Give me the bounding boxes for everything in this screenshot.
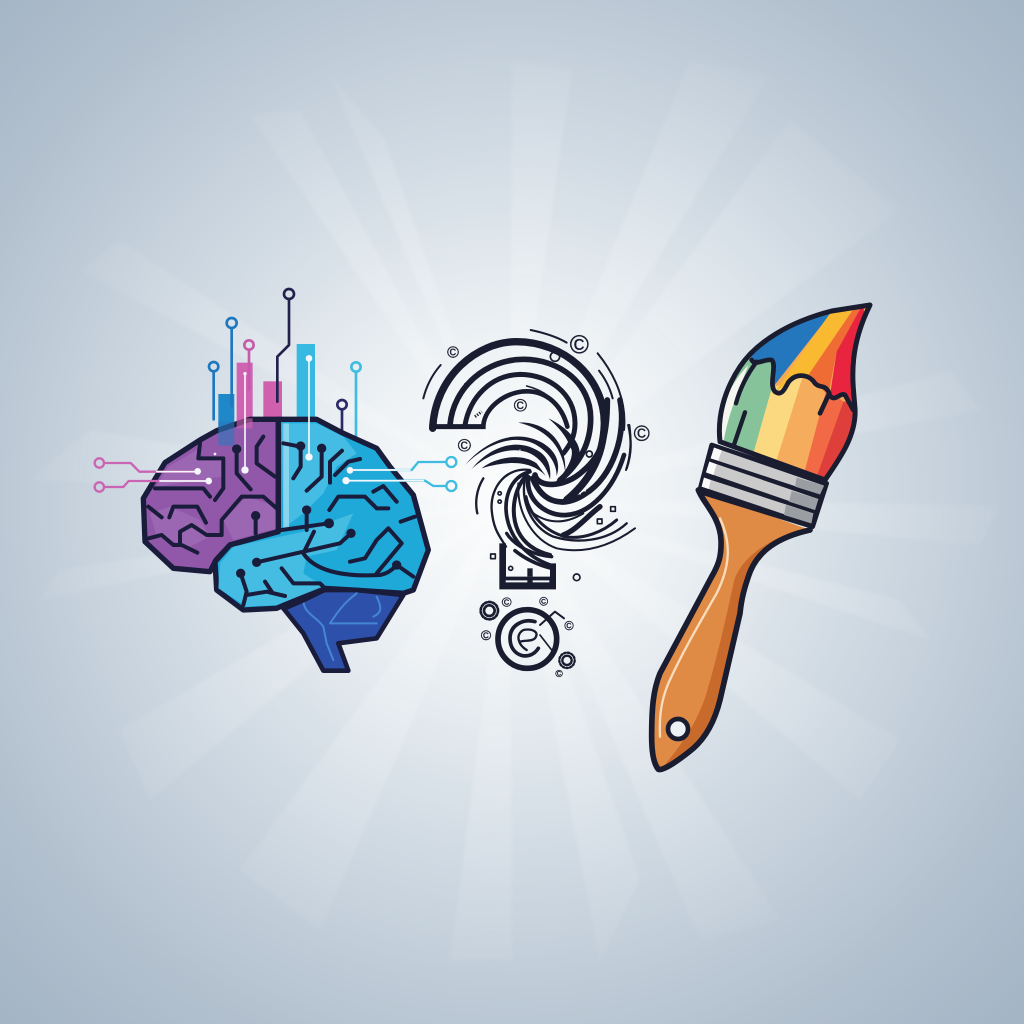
metal ferrule <box>699 445 827 527</box>
translucent bar overlays <box>218 418 253 446</box>
saturated upper stripes <box>750 314 830 385</box>
purple highlights <box>150 450 277 547</box>
blue hemisphere <box>215 419 428 610</box>
bristles with rainbow paint <box>713 302 873 482</box>
outer motion arcs <box>423 330 631 470</box>
gears <box>481 602 575 668</box>
cerebellum and stem <box>283 590 403 671</box>
question mark stem <box>499 533 556 589</box>
copyright symbols: © <box>481 627 492 643</box>
swirl texture dots <box>519 449 592 495</box>
brush head <box>699 302 873 527</box>
copyright symbols: © <box>502 594 512 609</box>
cerebellum veins <box>303 593 380 660</box>
question mark hook <box>429 342 604 500</box>
copyright symbols: © <box>514 395 527 415</box>
light vertical strip <box>283 423 289 528</box>
icon: circuit brain <box>95 289 456 671</box>
icon: paint brush <box>652 302 873 780</box>
white node lines <box>157 358 423 481</box>
copyright symbols: © <box>458 436 471 456</box>
paint drip accents <box>733 362 757 447</box>
tapered upper swirl arms <box>465 418 580 484</box>
copyright symbols <box>447 329 650 680</box>
large circled symbol <box>498 610 564 668</box>
sweeping swirl arms <box>476 400 635 565</box>
copyright symbols: © <box>539 595 548 609</box>
copyright symbols: © <box>555 669 563 680</box>
data bars behind brain <box>218 344 315 446</box>
small squares and dots <box>491 352 615 581</box>
brain nodes <box>232 441 401 578</box>
copyright symbols: © <box>634 421 650 446</box>
copyright symbols: © <box>570 329 589 359</box>
copyright symbols: © <box>447 344 459 361</box>
paint drip line <box>752 360 853 413</box>
brain fold lines <box>145 419 415 608</box>
left circuit traces <box>95 458 208 492</box>
icon: swirling question mark <box>423 329 650 680</box>
copyright symbols: © <box>564 619 574 633</box>
blue highlights <box>218 423 357 607</box>
pale lower stripes <box>724 357 772 452</box>
top circuit pins <box>209 289 361 450</box>
right circuit traces <box>346 457 456 491</box>
purple hemisphere <box>143 419 278 572</box>
swirl and stem of question mark <box>465 400 635 589</box>
white nodes <box>194 355 353 484</box>
brush handle <box>652 490 827 780</box>
